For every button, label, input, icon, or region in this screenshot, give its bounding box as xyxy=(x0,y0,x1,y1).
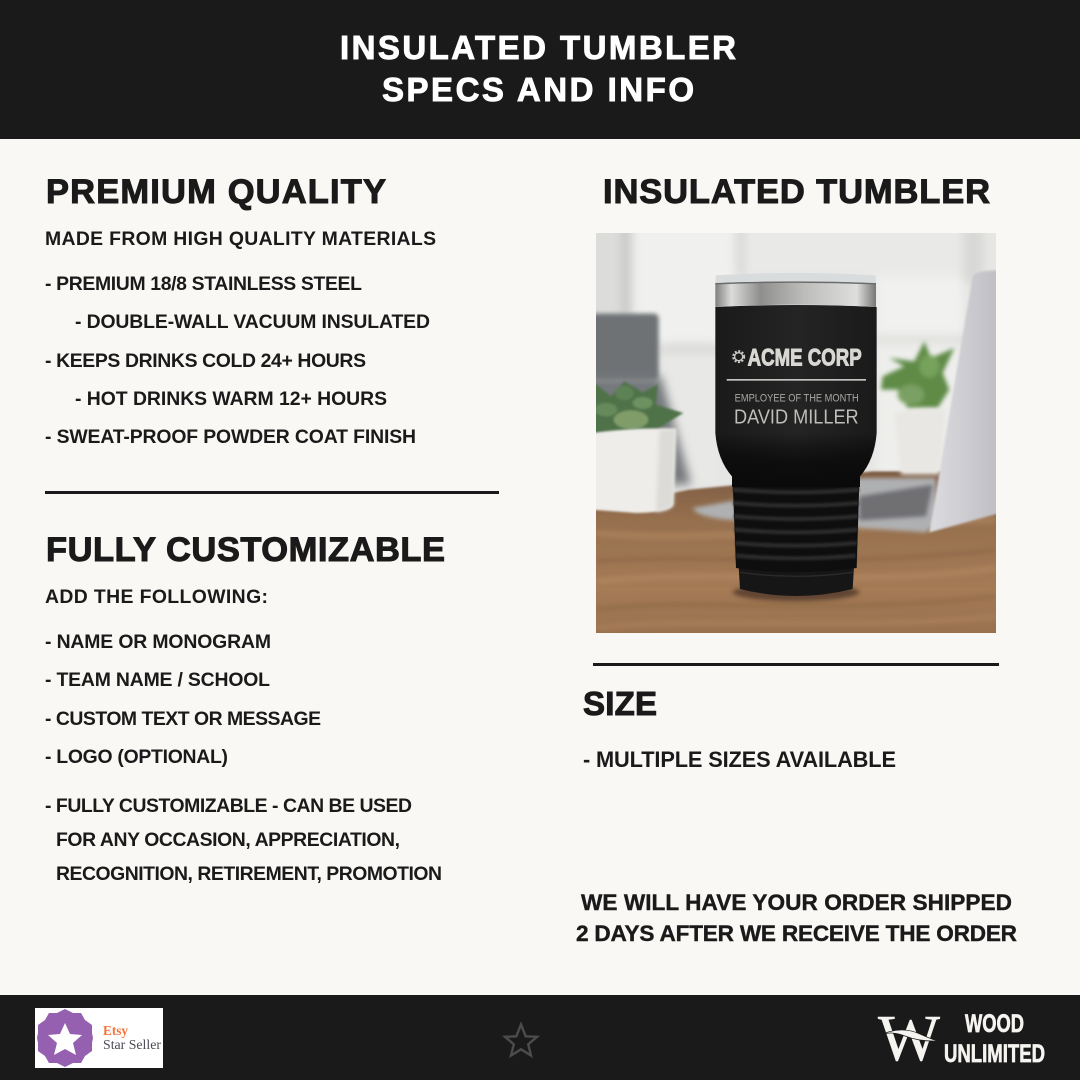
laptop xyxy=(693,478,936,532)
callout: shipping: 2 DAYS AFTER WE RECEIVE THE ORDER xyxy=(576,921,1017,946)
right plant xyxy=(881,341,954,408)
heading: premium quality: PREMIUM QUALITY xyxy=(46,173,386,211)
list: material features: - KEEPS DRINKS COLD 24+ HOURS xyxy=(45,350,366,372)
desk xyxy=(589,471,1003,640)
panel: size xyxy=(583,685,896,772)
title: SPECS AND INFO xyxy=(382,71,694,108)
logo: wood unlimited xyxy=(878,1002,1045,1075)
list: material features: - PREMIUM 18/8 STAINLESS STEEL xyxy=(45,273,362,295)
list: material features: - DOUBLE-WALL VACUUM INSULATED xyxy=(75,311,430,333)
panel: fully customizable xyxy=(45,531,445,885)
engraved text xyxy=(735,394,858,424)
icon: star outline xyxy=(505,1024,537,1056)
list: customization options xyxy=(45,631,321,768)
photo: engraved tumbler on desk xyxy=(596,233,996,633)
text: sizes available: - MULTIPLE SIZES AVAILABLE xyxy=(583,747,896,772)
tumbler xyxy=(715,273,877,601)
tumbler base xyxy=(739,566,854,596)
title xyxy=(340,29,736,108)
heading: size: SIZE xyxy=(583,685,657,722)
text: occasions note: - FULLY CUSTOMIZABLE - CAN BE USED xyxy=(45,795,412,817)
text: occasions note: FOR ANY OCCASION, APPRECIATION, xyxy=(56,829,400,851)
engraved logo: ACME CORP xyxy=(748,344,862,371)
logo: wood unlimited: UNLIMITED xyxy=(944,1040,1045,1068)
engraved text: DAVID MILLER xyxy=(734,407,859,429)
badge: Etsy star seller xyxy=(35,1008,163,1068)
icon: purple seal with star xyxy=(37,1009,93,1067)
list: material features: - SWEAT-PROOF POWDER COAT FINISH xyxy=(45,426,416,448)
heading: fully customizable: FULLY CUSTOMIZABLE xyxy=(46,531,445,569)
list: material features xyxy=(45,273,430,448)
tumbler lid xyxy=(715,273,876,283)
list: material features: - HOT DRINKS WARM 12+ HOURS xyxy=(75,388,387,410)
panel: premium quality xyxy=(45,173,436,448)
blurred chair xyxy=(583,314,659,380)
logo: wood unlimited: WOOD xyxy=(965,1010,1024,1038)
text: occasions note: RECOGNITION, RETIREMENT, PROMOTION xyxy=(56,863,442,885)
tumbler ribs xyxy=(733,481,859,572)
title: INSULATED TUMBLER xyxy=(340,29,736,66)
tumbler body xyxy=(715,305,877,487)
list: customization options: - CUSTOM TEXT OR MESSAGE xyxy=(45,708,321,730)
callout: shipping: WE WILL HAVE YOUR ORDER SHIPPED xyxy=(581,890,1012,915)
badge: Etsy star seller: Etsy xyxy=(103,1024,128,1039)
text: customization intro: ADD THE FOLLOWING: xyxy=(45,586,268,608)
text: materials intro: MADE FROM HIGH QUALITY MATERIALS xyxy=(45,228,436,250)
logo mark: W: W xyxy=(878,1002,941,1075)
engraved text: EMPLOYEE OF THE MONTH xyxy=(735,392,859,404)
callout: shipping xyxy=(576,890,1017,946)
list: customization options: - LOGO (OPTIONAL) xyxy=(45,746,228,768)
text: occasions note xyxy=(45,795,442,885)
list: customization options: - TEAM NAME / SCHOOL xyxy=(45,669,270,691)
blurred window xyxy=(596,233,982,338)
list: customization options: - NAME OR MONOGRAM xyxy=(45,631,271,653)
engraved logo xyxy=(732,348,862,366)
footer band xyxy=(0,995,1080,1080)
tumbler steel rim xyxy=(715,283,876,307)
heading: insulated tumbler: INSULATED TUMBLER xyxy=(603,173,990,211)
header band xyxy=(0,0,1080,139)
badge: Etsy star seller: Star Seller xyxy=(103,1038,161,1053)
left plant xyxy=(593,381,683,433)
